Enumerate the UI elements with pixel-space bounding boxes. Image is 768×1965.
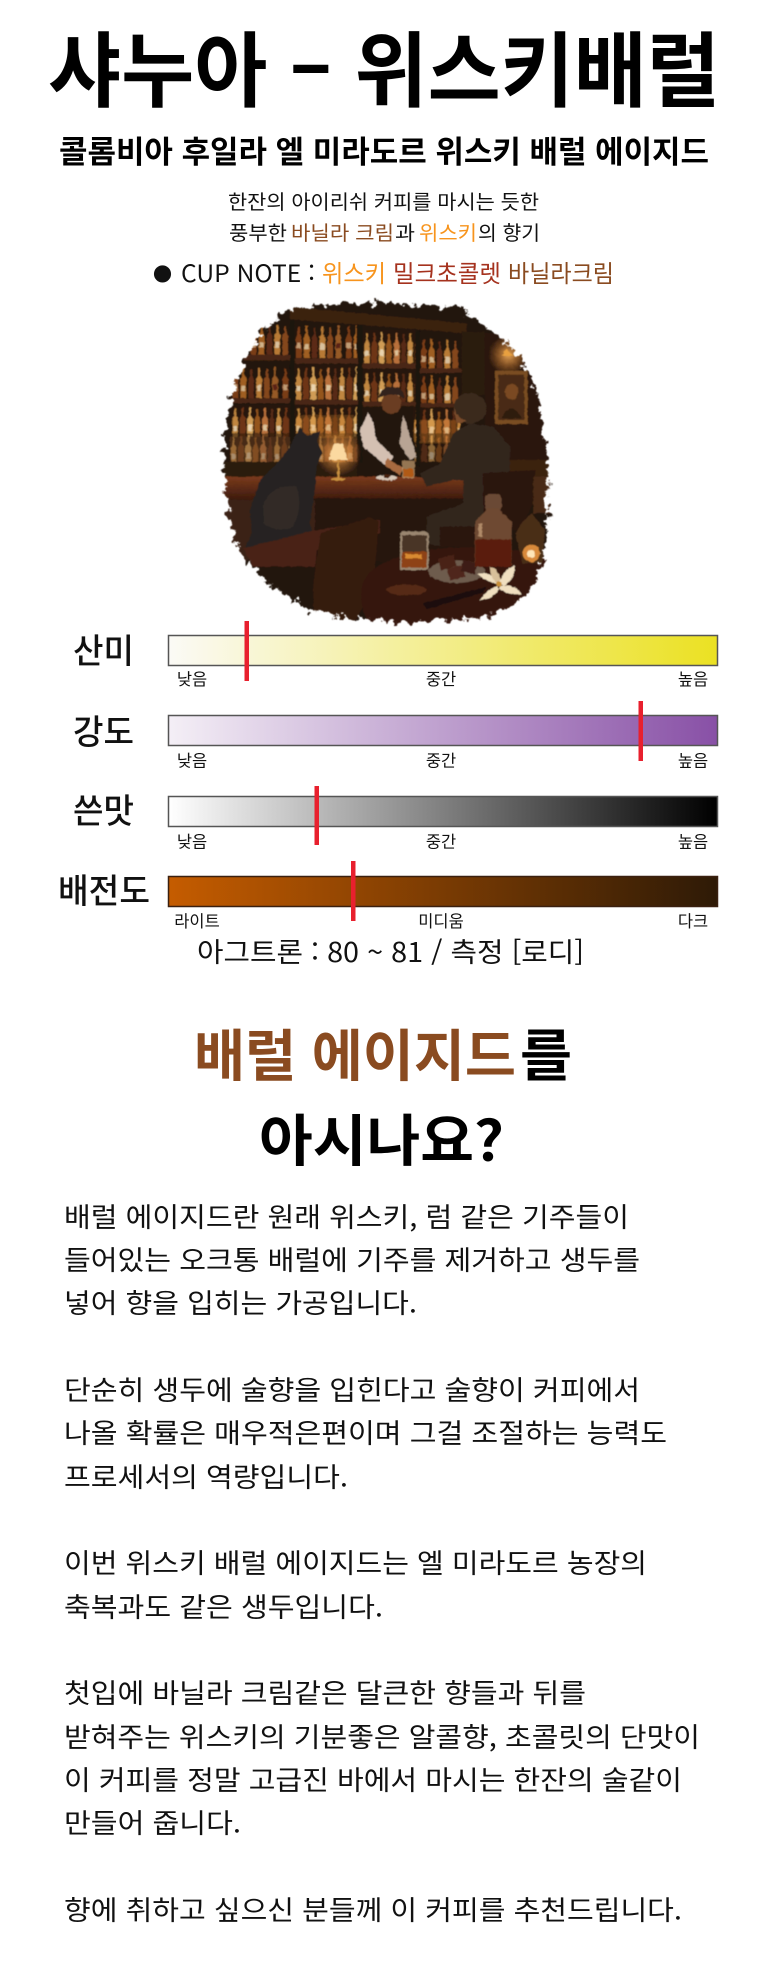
body paragraph 4 — [64, 1672, 700, 1841]
gauge: 쓴맛: 높음 — [678, 828, 708, 852]
tagline: 위스키 — [419, 217, 477, 246]
gauge: 배전도: 다크 — [678, 908, 708, 932]
body paragraph 4: 받혀주는 위스키의 기분좋은 알콜향, 초콜릿의 단맛이 — [64, 1716, 700, 1755]
plate of chocolate — [428, 555, 485, 583]
right wall — [462, 331, 477, 394]
gauge: 강도: 낮음 — [177, 748, 207, 772]
front chair back — [313, 517, 379, 623]
customer — [420, 393, 510, 547]
gauge: 강도 — [73, 701, 718, 772]
bartender — [357, 387, 420, 477]
gauge: 쓴맛 — [73, 784, 718, 852]
back counter — [230, 460, 357, 476]
body paragraph 2 — [64, 1369, 667, 1495]
body paragraph 4: 첫입에 바닐라 크림같은 달큰한 향들과 뒤를 — [64, 1672, 586, 1711]
counter top — [220, 477, 465, 500]
body paragraph 3 — [64, 1542, 647, 1625]
subtitle: 콜롬비아 후일라 엘 미라도르 위스키 배럴 에이지드 — [59, 127, 709, 172]
gauge: 쓴맛: 쓴맛 — [73, 784, 134, 833]
body paragraph 1: 들어있는 오크통 배럴에 기주를 제거하고 생두를 — [64, 1239, 640, 1278]
body paragraph 1: 넣어 향을 입히는 가공입니다. — [64, 1282, 417, 1321]
bottle shelves — [230, 322, 460, 463]
gauge: 산미 — [73, 621, 718, 690]
cup note — [153, 254, 614, 289]
body paragraph 3: 축복과도 같은 생두입니다. — [64, 1586, 383, 1625]
section heading: 아시나요? — [259, 1097, 504, 1178]
gauge: 강도: 높음 — [678, 748, 708, 772]
section heading: 를 — [520, 1012, 572, 1093]
body paragraph 4: 만들어 줍니다. — [64, 1802, 241, 1841]
gauge: 산미: 낮음 — [177, 666, 207, 690]
body paragraph 1 — [64, 1196, 640, 1321]
body paragraph 4: 이 커피를 정말 고급진 바에서 마시는 한잔의 술같이 — [64, 1759, 682, 1798]
small plate and glass — [376, 461, 415, 480]
tagline: 바닐라 크림 — [291, 217, 394, 246]
seat — [243, 520, 380, 573]
gauge: 배전도 — [58, 861, 718, 932]
cup note: CUP NOTE : — [181, 254, 315, 289]
gauge: 산미: 산미 — [73, 624, 134, 673]
section heading — [194, 1012, 572, 1178]
tagline: 과 — [395, 217, 415, 246]
tagline: 의 향기 — [478, 217, 540, 246]
body paragraph 2: 프로세서의 역량입니다. — [64, 1456, 348, 1495]
gauge: 배전도: 라이트 — [174, 908, 220, 932]
gauge: 배전도: 배전도 — [58, 864, 150, 913]
cup note: 위스키 — [322, 254, 386, 289]
gauge: 쓴맛: 낮음 — [177, 828, 207, 852]
gauge: 산미: 높음 — [678, 666, 708, 690]
decanter — [475, 494, 512, 567]
cup note: 밀크초콜렛 — [393, 254, 501, 289]
framed picture — [495, 371, 528, 424]
shelf boards — [230, 307, 467, 467]
illustration: whisky bar with black cat — [210, 290, 563, 637]
body paragraph 2: 나올 확률은 매우적은편이며 그걸 조절하는 능력도 — [64, 1412, 667, 1451]
gauge: 배전도: 미디움 — [418, 908, 464, 932]
gauge: 산미: 중간 — [426, 666, 456, 690]
tagline: 풍부한 — [229, 217, 287, 246]
section heading: 배럴 에이지드 — [194, 1012, 516, 1093]
whisky glass — [400, 532, 429, 570]
lantern — [516, 513, 545, 563]
body paragraph 2: 단순히 생두에 술향을 입힌다고 술향이 커피에서 — [64, 1369, 640, 1408]
cat — [245, 427, 323, 555]
tagline: 한잔의 아이리쉬 커피를 마시는 듯한 — [228, 186, 539, 215]
body paragraph 3: 이번 위스키 배럴 에이지드는 엘 미라도르 농장의 — [64, 1542, 647, 1581]
title: 샤누아 – 위스키배럴 — [48, 5, 720, 124]
lamp on counter — [315, 430, 362, 481]
tagline — [228, 186, 540, 246]
body closing line: 향에 취하고 싶으신 분들께 이 커피를 추천드립니다. — [64, 1889, 682, 1928]
vanilla flower — [477, 566, 522, 600]
body paragraph 1: 배럴 에이지드란 원래 위스키, 럼 같은 기주들이 — [64, 1196, 629, 1235]
right chair — [482, 470, 536, 512]
round table — [361, 547, 548, 630]
cup note: ● — [153, 260, 172, 287]
cup note: 바닐라크림 — [508, 254, 614, 289]
gauge: 강도: 중간 — [426, 748, 456, 772]
gauge: 강도: 강도 — [73, 705, 134, 754]
agtron reading: 아그트론 : 80 ~ 81 / 측정 [로디] — [197, 931, 584, 970]
gauge: 쓴맛: 중간 — [426, 828, 456, 852]
